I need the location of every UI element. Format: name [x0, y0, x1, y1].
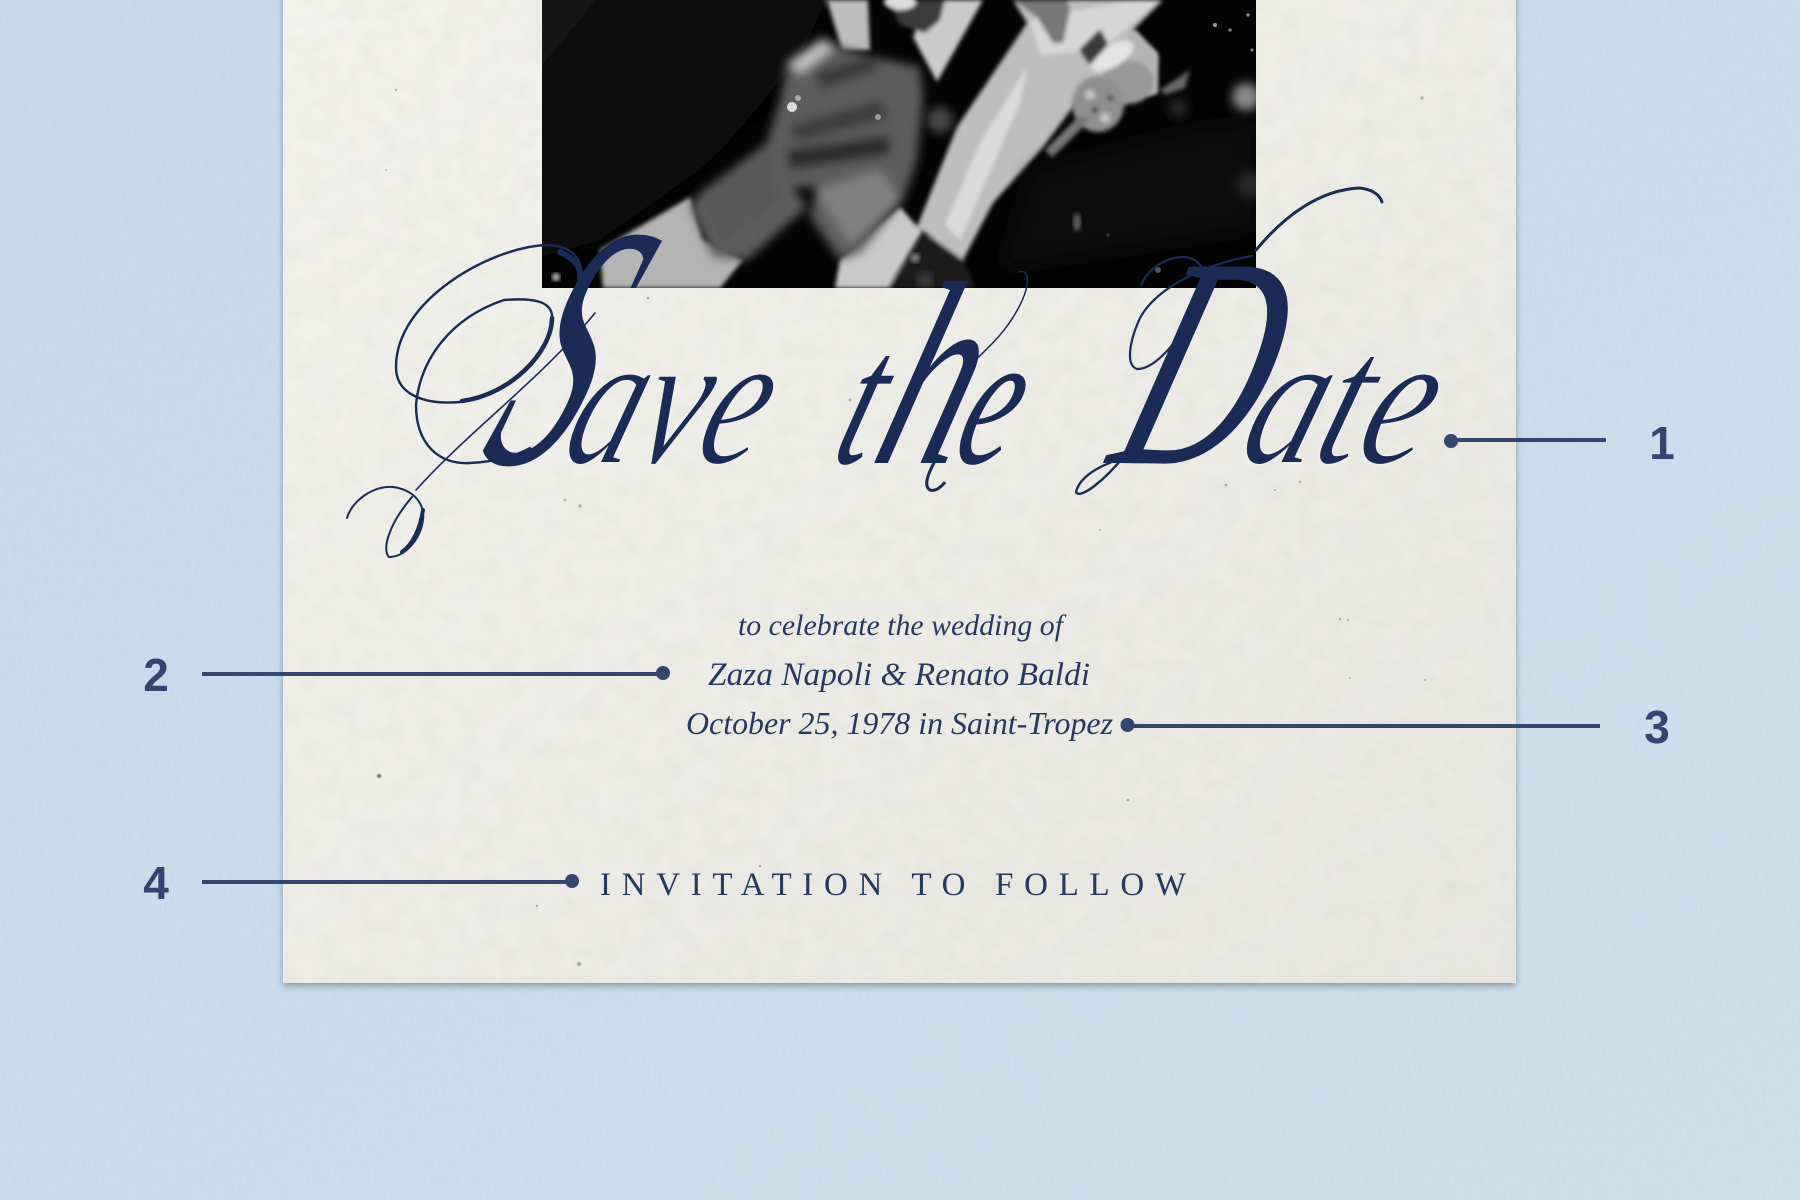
callout 3: 3	[1644, 701, 1670, 753]
flourish: D swash	[1076, 188, 1382, 494]
left cuff	[600, 197, 743, 288]
callout 4: 4	[143, 857, 169, 909]
word: Date: a	[1221, 295, 1366, 505]
line: invitation to follow: INVITATION TO FOLLOW	[600, 867, 1187, 903]
right shirt	[917, 0, 1163, 260]
callout 3	[1120, 701, 1670, 753]
word: Save: S	[440, 156, 704, 538]
word: the: h	[849, 230, 1029, 520]
line: to celebrate: to celebrate the wedding of	[738, 609, 1067, 642]
photo: two grooms holding hands (black and white)	[530, 0, 1264, 288]
callout 1	[1444, 417, 1675, 469]
headline: Save the Date script	[347, 156, 1473, 557]
line: names: Zaza Napoli & Renato Baldi	[708, 657, 1090, 693]
callout 2: 2	[143, 649, 169, 701]
tie	[1013, 0, 1070, 43]
word: Date	[1076, 188, 1473, 528]
clasped hands	[690, 37, 923, 260]
right jacket sheen	[1020, 162, 1254, 237]
top flower	[888, 0, 945, 33]
word: Save	[347, 156, 808, 557]
left jacket	[530, 0, 830, 260]
word: Date: D	[1081, 195, 1333, 528]
rose boutonniere	[1122, 28, 1162, 107]
light background wedge	[913, 0, 983, 82]
flourish: S swash	[347, 245, 595, 557]
word: Date: t	[1295, 295, 1409, 505]
callout 4	[143, 857, 579, 909]
line: date and place: October 25, 1978 in Saint-Tropez	[686, 705, 1114, 741]
word: the	[810, 230, 1080, 520]
word: Date: e	[1337, 295, 1473, 505]
text block: invitation wording	[686, 609, 1114, 741]
callout 1: 1	[1649, 417, 1675, 469]
word: the: e	[936, 294, 1059, 504]
right cuff	[835, 207, 922, 288]
callout 2	[143, 649, 670, 701]
word: the: t	[816, 294, 921, 504]
panel: paper invitation card	[283, 0, 1516, 986]
word: Save: ave	[544, 295, 808, 505]
left shirt strip	[827, 0, 870, 50]
button sleeve	[888, 236, 975, 288]
ring and bokeh highlights	[552, 13, 1264, 286]
